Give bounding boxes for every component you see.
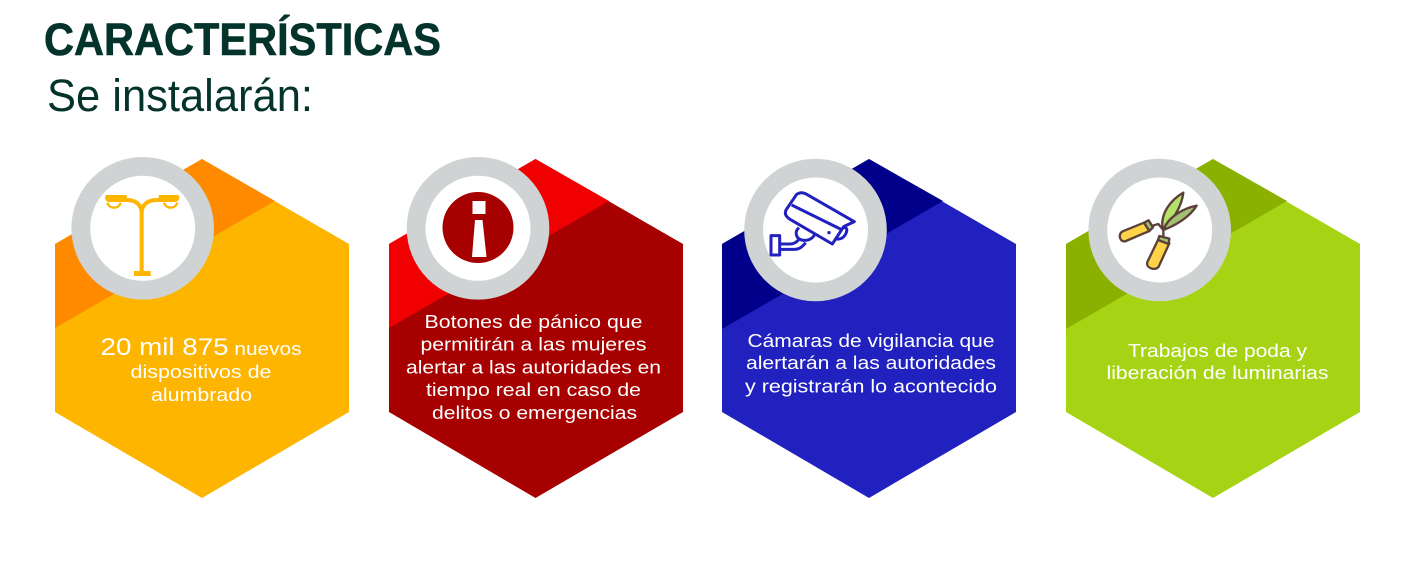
text: cámaras: Cámaras de vigilancia que: [748, 331, 994, 351]
hexagon: [55, 159, 349, 498]
subtitle: Se instalarán:: [47, 70, 313, 121]
icon: security camera: [771, 193, 854, 255]
text: poda: Trabajos de poda y: [1128, 341, 1307, 361]
hexagon dark band: [389, 159, 609, 328]
text: cámaras: alertarán a las autoridades: [746, 353, 996, 373]
text: cámaras: y registrarán lo acontecido: [745, 376, 997, 396]
panel: poda: [1066, 159, 1360, 498]
text: botones: alertar a las autoridades en: [406, 358, 661, 378]
icon: street lamp: [105, 195, 179, 276]
text: cámaras: [745, 331, 997, 396]
hexagon: [722, 159, 1016, 498]
hexagon: [389, 159, 683, 498]
title: CARACTERÍSTICAS: [44, 14, 441, 65]
panel: alumbrado: [55, 159, 349, 498]
text: poda: [1106, 341, 1328, 383]
text: alumbrado: 20 mil 875 nuevos: [100, 334, 302, 361]
icon: information: [442, 192, 514, 263]
text: botones: [406, 312, 661, 423]
icon ring: [754, 168, 877, 292]
hexagon dark band: [55, 159, 275, 328]
hexagon dark band: [722, 159, 943, 329]
icon ring: [416, 166, 540, 290]
text: botones: permitirán a las mujeres: [420, 334, 646, 354]
text: alumbrado: dispositivos de: [130, 362, 272, 382]
text: botones: tiempo real en caso de: [426, 380, 641, 400]
text: botones: Botones de pánico que: [424, 312, 642, 332]
icon ring: [1098, 168, 1222, 292]
icon ring: [81, 166, 205, 290]
hexagon dark band: [1066, 159, 1287, 329]
panel: cámaras: [722, 159, 1016, 498]
text: botones: delitos o emergencias: [432, 403, 637, 423]
text: poda: liberación de luminarias: [1106, 363, 1328, 383]
text: alumbrado: [100, 334, 302, 405]
hexagon: [1066, 159, 1360, 498]
panel: botones de pánico: [389, 159, 683, 498]
text: alumbrado: alumbrado: [151, 385, 252, 405]
icon: pruning shears: [1120, 193, 1197, 269]
